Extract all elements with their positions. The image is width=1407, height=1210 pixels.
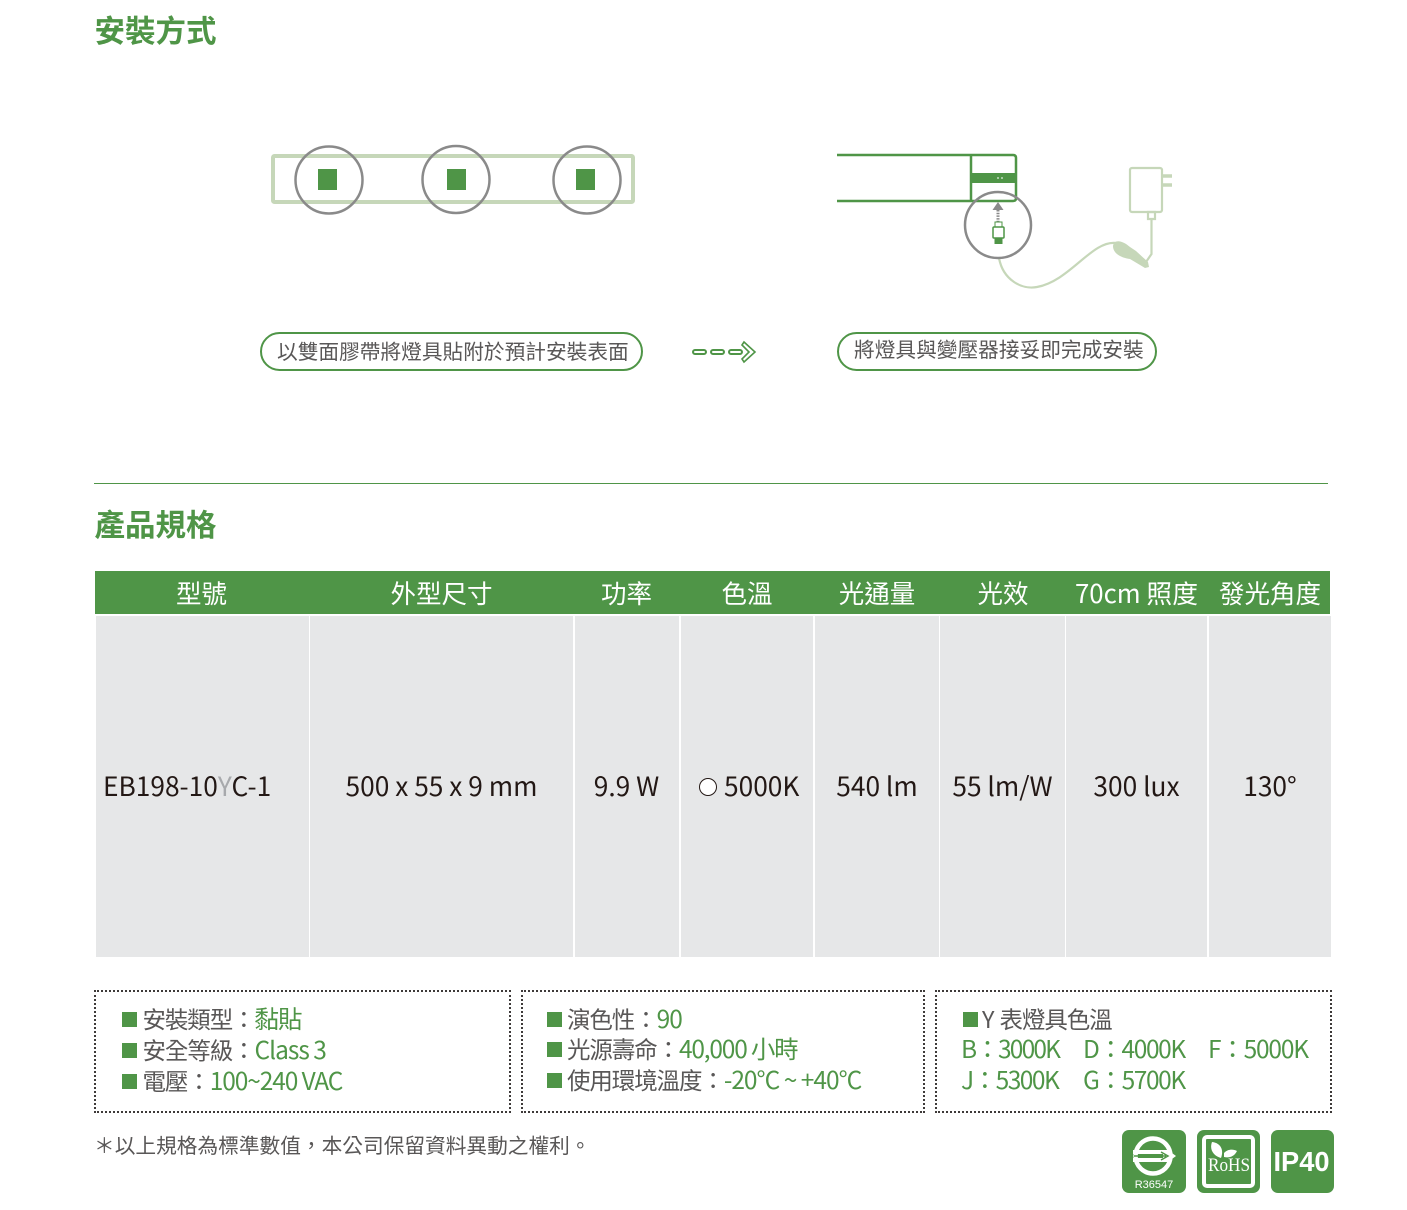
step 2 caption: 將燈具與變壓器接妥即完成安裝 bbox=[854, 333, 1144, 363]
step 2 illustration: fixture connected to transformer bbox=[837, 154, 1172, 289]
badge: BSMI R36547 bbox=[1122, 1130, 1186, 1193]
heading: installation method: 安裝方式 bbox=[94, 7, 216, 51]
value: dimensions: 500 x 55 x 9 mm bbox=[346, 765, 537, 804]
note box: installation and safety: 安裝類型：黏貼 bbox=[142, 1001, 302, 1036]
footnote: ＊以上規格為標準數值，本公司保留資料異動之權利。 bbox=[94, 1129, 591, 1159]
step 1 caption: 以雙面膠帶將燈具貼附於預計安裝表面 bbox=[277, 335, 629, 365]
note box: colour temperature codes: F：5000K bbox=[1208, 1031, 1308, 1066]
note box: colour temperature codes: Y 表燈具色溫 bbox=[982, 1001, 1112, 1035]
badge: BSMI R36547: R36547 bbox=[1135, 1179, 1173, 1191]
specification table bbox=[95, 571, 1331, 957]
cell: model bbox=[96, 616, 309, 957]
column heading: power: 功率 bbox=[601, 574, 652, 611]
note box: colour temperature codes: J：5300K bbox=[961, 1062, 1058, 1097]
cell: illuminance bbox=[1066, 616, 1207, 957]
column heading: efficacy: 光效 bbox=[977, 574, 1028, 611]
cell: colour temperature bbox=[681, 616, 813, 957]
cell: luminous flux bbox=[815, 616, 939, 957]
note lines bbox=[547, 1012, 562, 1027]
note box: colour rendering and lifetime: 演色性：90 bbox=[567, 1001, 682, 1036]
note box: colour temperature codes: G：5700K bbox=[1083, 1062, 1185, 1097]
badge: RoHS bbox=[1197, 1130, 1260, 1193]
note box: installation and safety: 電壓：100~240 VAC bbox=[142, 1063, 342, 1098]
column heading: illuminance: 70cm 照度 bbox=[1075, 574, 1198, 611]
column heading: dimensions: 外型尺寸 bbox=[390, 574, 492, 611]
note box: colour rendering and lifetime: 使用環境溫度：-20°C ~ +40°C bbox=[567, 1062, 861, 1097]
value: colour temperature: 5000K bbox=[724, 765, 799, 804]
note box: colour temperature codes bbox=[935, 990, 1332, 1113]
cell: beam angle bbox=[1209, 616, 1331, 957]
value: power: 9.9 W bbox=[594, 765, 659, 804]
column heading: colour temperature: 色溫 bbox=[721, 574, 772, 611]
note box: colour rendering and lifetime bbox=[521, 990, 925, 1113]
value: efficacy: 55 lm/W bbox=[952, 765, 1053, 804]
column heading: beam angle: 發光角度 bbox=[1219, 574, 1321, 611]
value: luminous flux: 540 lm bbox=[836, 765, 918, 804]
note box: installation and safety: 安全等級：Class 3 bbox=[142, 1032, 326, 1067]
heading: product specifications: 產品規格 bbox=[94, 501, 216, 545]
value: illuminance: 300 lux bbox=[1093, 765, 1180, 804]
note box: colour temperature codes: B：3000K bbox=[961, 1031, 1059, 1066]
cell: dimensions bbox=[310, 616, 573, 957]
column heading: model: 型號 bbox=[176, 574, 227, 611]
divider bbox=[94, 483, 1328, 484]
note box: colour rendering and lifetime: 光源壽命：40,000 小時 bbox=[567, 1031, 798, 1066]
cell: efficacy bbox=[940, 616, 1065, 957]
badge: IP40: IP40 bbox=[1274, 1146, 1330, 1177]
note box: installation and safety bbox=[94, 990, 511, 1113]
step 2 caption bbox=[837, 332, 1157, 371]
value: beam angle: 130° bbox=[1243, 765, 1297, 804]
table header bar bbox=[95, 571, 1330, 614]
column heading: luminous flux: 光通量 bbox=[839, 574, 915, 611]
cell: power bbox=[575, 616, 679, 957]
badge: RoHS: RoHS bbox=[1208, 1155, 1250, 1176]
note lines bbox=[963, 1012, 978, 1027]
badge: IP40 bbox=[1271, 1130, 1334, 1193]
value: model: EB198-10YC-1 bbox=[103, 765, 271, 804]
note lines bbox=[122, 1012, 137, 1027]
step 1 illustration: adhesive tape on fixture bbox=[271, 144, 635, 215]
arrow: next step bbox=[692, 340, 756, 364]
note box: colour temperature codes: D：4000K bbox=[1083, 1031, 1185, 1066]
icon: colour temperature dot bbox=[699, 778, 717, 796]
